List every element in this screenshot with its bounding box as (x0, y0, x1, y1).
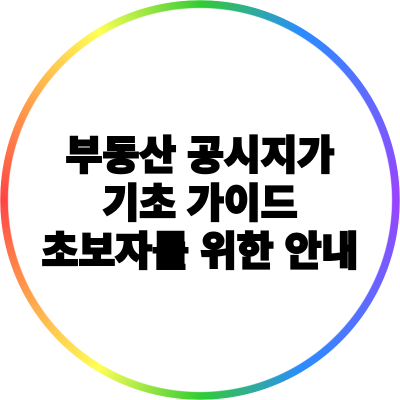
title line 3: 초보자를 위한 안내 (42, 230, 358, 274)
title line 2: 기초 가이드 (102, 182, 298, 226)
title line 1: 부동산 공시지가 (66, 134, 334, 178)
